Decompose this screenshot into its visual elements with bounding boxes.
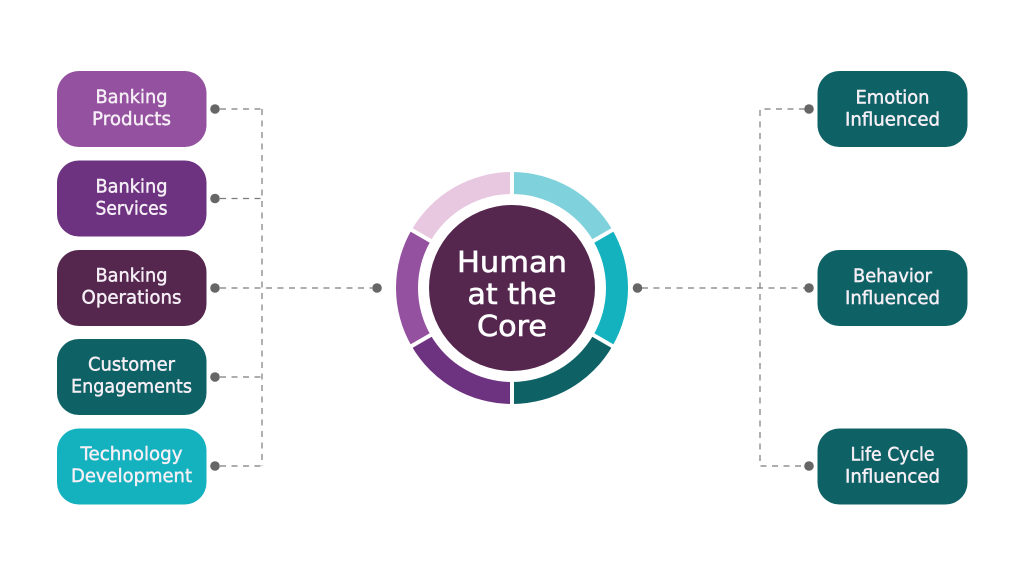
box: Banking Operations: [57, 250, 206, 326]
right connector lines: [642, 109, 805, 466]
box: Technology Development: Technology: [80, 444, 183, 465]
box: Banking Operations: Operations: [82, 288, 182, 309]
box: Banking Services: Banking: [96, 176, 168, 198]
box: Banking Products: Banking: [96, 87, 168, 108]
box: Life Cycle Influenced: Life Cycle: [850, 445, 934, 466]
box: Technology Development: Development: [71, 466, 192, 487]
box: Emotion Influenced: Influenced: [845, 110, 940, 131]
box: Emotion Influenced: Emotion: [856, 88, 930, 108]
box: Customer Engagements: Customer: [88, 355, 175, 376]
box: Customer Engagements: Engagements: [71, 377, 192, 398]
box: Banking Services: [57, 160, 206, 236]
box: Behavior Influenced: Influenced: [845, 288, 940, 309]
box: Life Cycle Influenced: [818, 428, 968, 504]
center circle: Human at the Core: [429, 205, 595, 371]
segmented ring: [396, 168, 628, 408]
center circle: Human at the Core: at the: [468, 277, 556, 311]
box: Banking Operations: Banking: [96, 266, 168, 287]
right connector dots: [633, 104, 814, 471]
box: Customer Engagements: [57, 339, 206, 415]
center circle: Human at the Core: Human: [457, 245, 567, 279]
box: Banking Products: Products: [92, 109, 171, 130]
box: Behavior Influenced: [818, 250, 968, 326]
left connector dots: [210, 104, 382, 471]
box: Banking Services: Services: [96, 198, 168, 220]
box: Life Cycle Influenced: Influenced: [845, 467, 940, 488]
box: Emotion Influenced: [818, 71, 968, 147]
center circle: Human at the Core: Core: [477, 309, 547, 343]
box: Technology Development: [57, 428, 206, 504]
box: Behavior Influenced: Behavior: [853, 266, 932, 287]
left connector lines: [220, 109, 372, 466]
box: Banking Products: [57, 71, 206, 147]
